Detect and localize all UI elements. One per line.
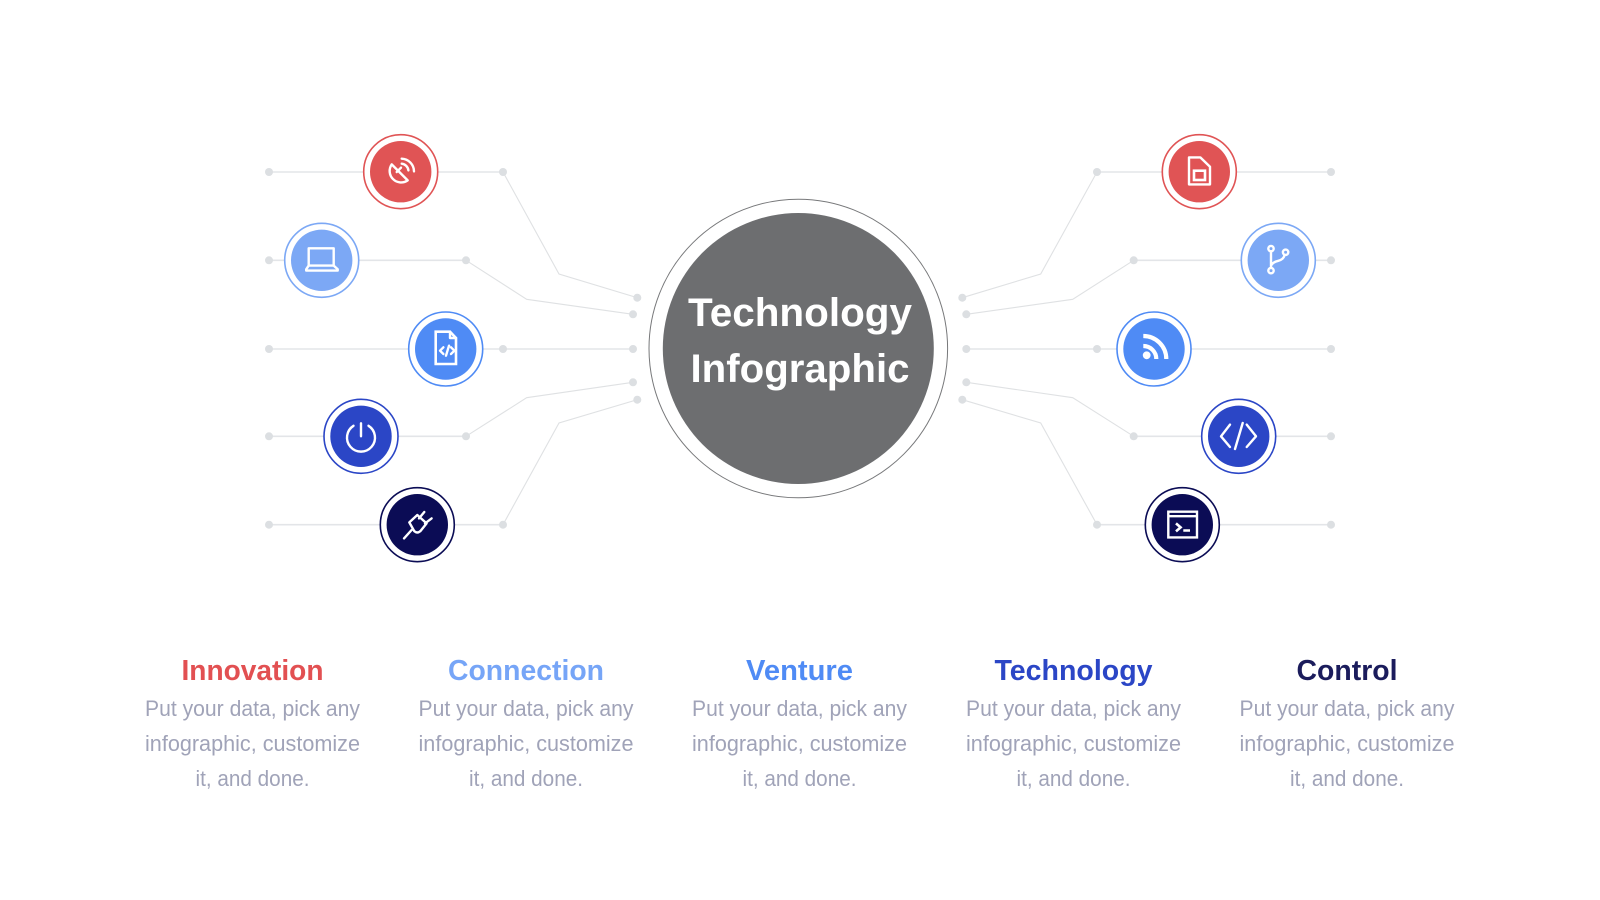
text block: Connection: it, and done. [469,766,583,791]
central circle with title: Infographic [690,347,910,391]
right connector network [958,168,1335,529]
text block: Control: Control [1296,655,1398,687]
text block: Connection: infographic, customize [418,731,634,756]
text block: Control: it, and done. [1290,766,1404,791]
central circle with title [649,199,948,498]
central circle with title: Technology [688,291,913,335]
text block: Control [1240,655,1454,791]
icon: RSS feed [1117,312,1191,386]
text block: Connection: Connection [448,655,604,687]
icon: SIM card [1162,135,1236,209]
icon: power button [324,399,398,473]
text block: Technology: it, and done. [1016,766,1130,791]
text block: Venture [692,655,907,791]
text block: Innovation: Put your data, pick any [145,696,360,721]
text block: Venture: infographic, customize [692,731,907,756]
text block: Technology: infographic, customize [966,731,1181,756]
text block: Innovation: it, and done. [196,766,310,791]
text block: Innovation: infographic, customize [145,731,360,756]
text block: Innovation [145,655,360,791]
left connector network [265,168,641,529]
icon: git branch [1241,223,1315,297]
text block: Venture: Venture [746,655,853,687]
icon: code file [409,312,483,386]
text block: Technology [966,655,1181,791]
icon: plug [380,488,454,562]
text block: Venture: it, and done. [742,766,856,791]
text block: Control: Put your data, pick any [1240,696,1454,721]
icon: terminal window [1145,488,1219,562]
text block: Venture: Put your data, pick any [692,696,907,721]
icon: laptop [285,223,359,297]
icon: satellite dish [364,135,438,209]
text block: Connection [418,655,634,791]
text block: Connection: Put your data, pick any [418,696,634,721]
text block: Control: infographic, customize [1240,731,1454,756]
text block: Innovation: Innovation [182,655,324,687]
text block: Technology: Technology [994,655,1152,687]
icon: code brackets [1202,399,1276,473]
text block: Technology: Put your data, pick any [966,696,1181,721]
